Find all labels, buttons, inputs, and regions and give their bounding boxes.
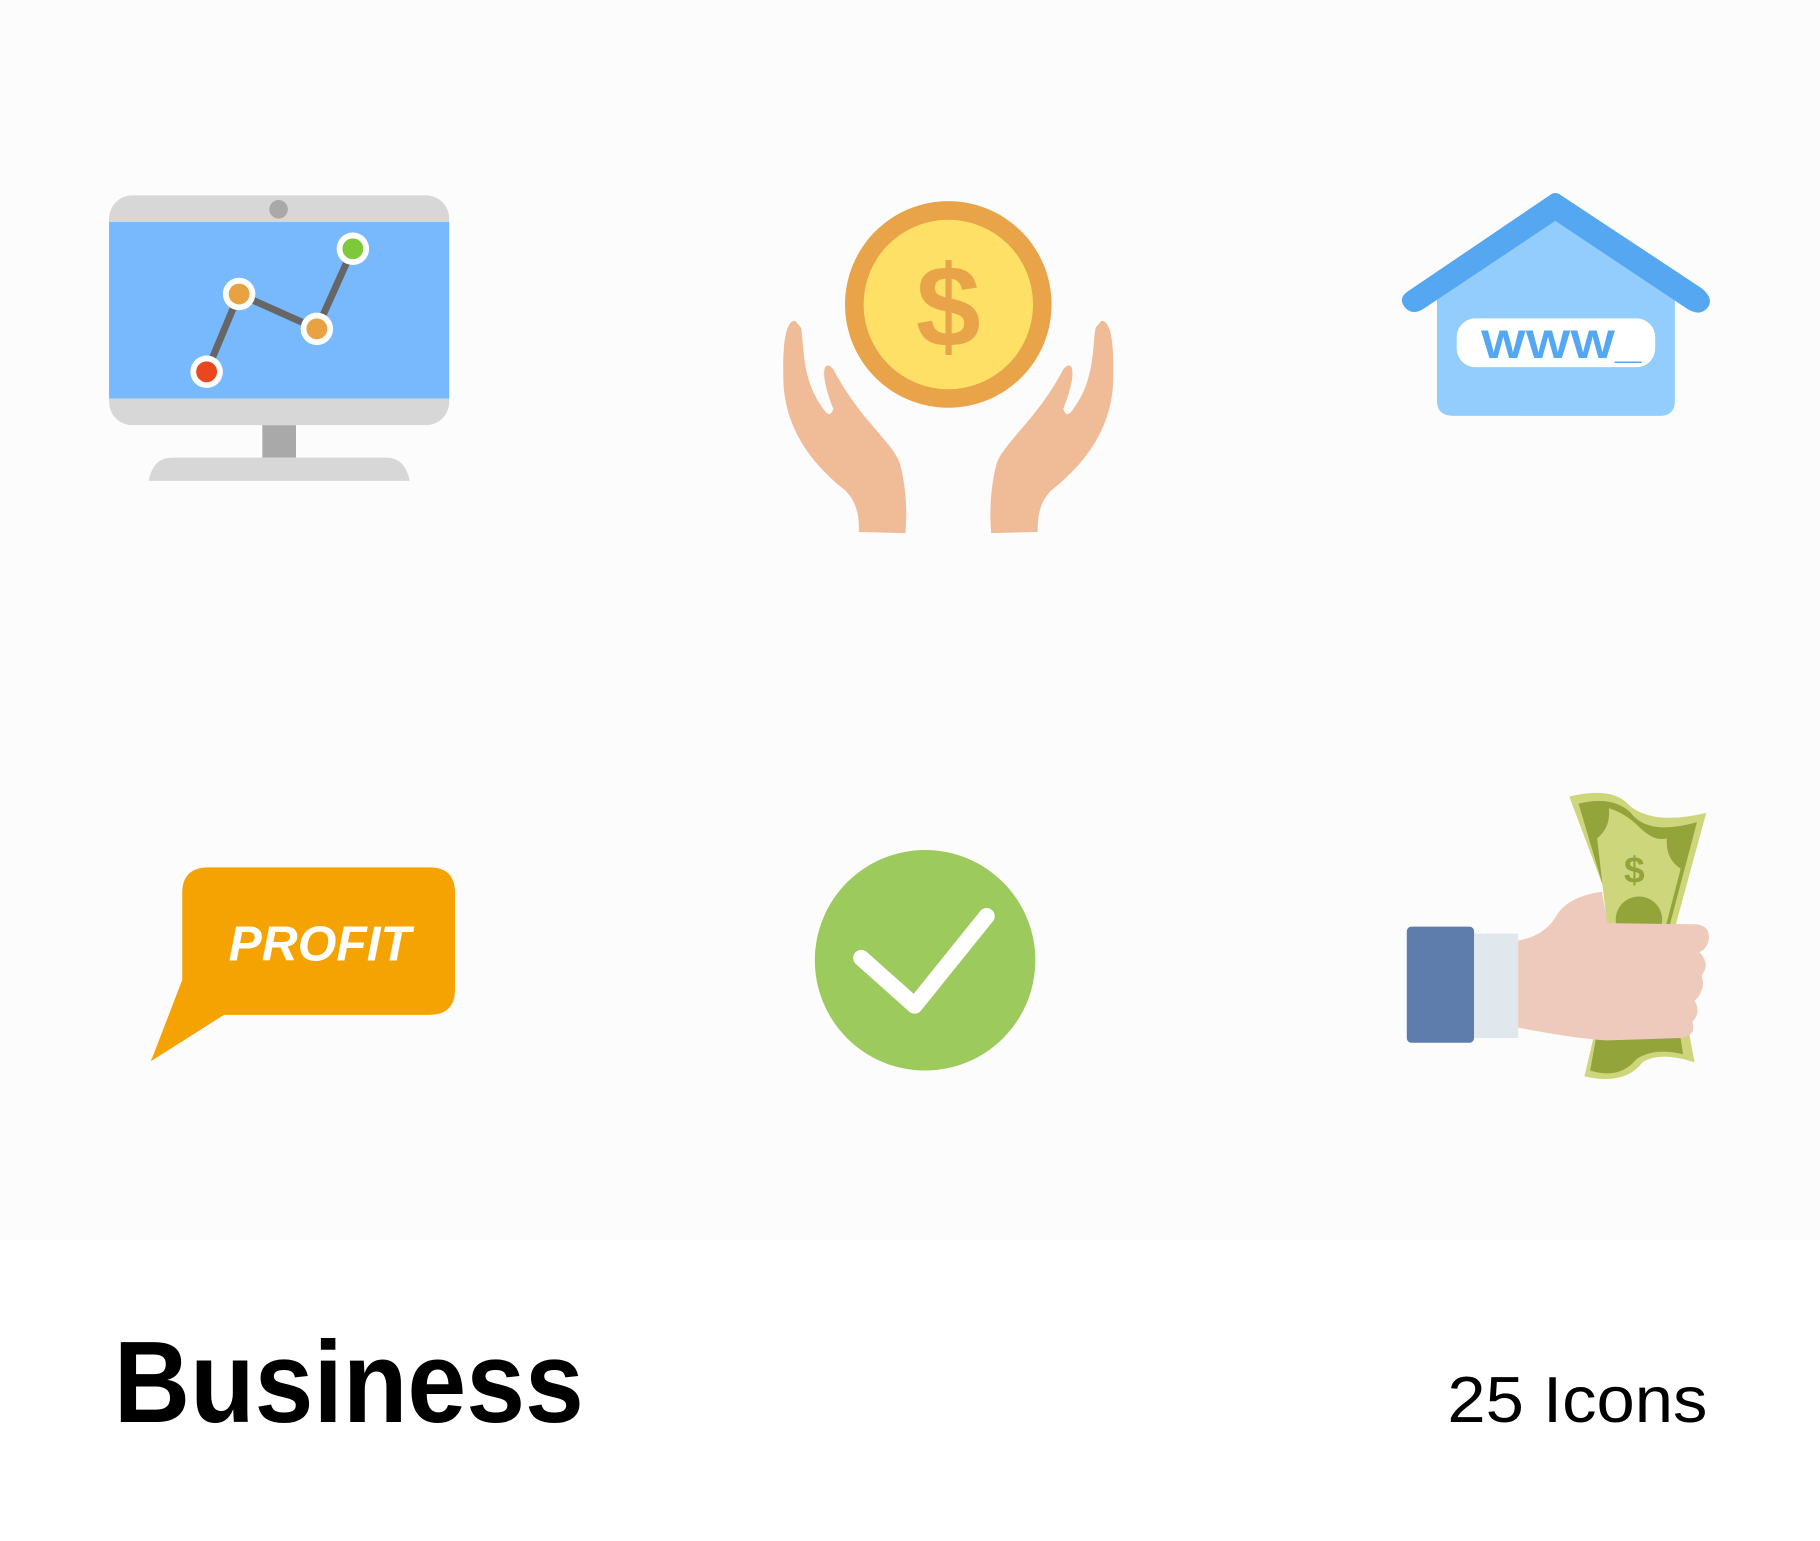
icon: monitor with chart — [109, 195, 449, 481]
title: Business — [114, 1317, 584, 1447]
icon: profit speech bubble — [151, 867, 455, 1061]
icon: check circle — [815, 850, 1035, 1071]
icon: house with www — [1402, 193, 1710, 416]
icon: profit speech bubble: PROFIT — [229, 917, 415, 971]
subtitle: icon count: 25 Icons — [1447, 1363, 1707, 1436]
icon: hands with coin — [783, 201, 1113, 533]
icon: hands with coin: $ — [916, 241, 981, 371]
icon: hand holding money — [1407, 793, 1709, 1079]
icon: hand holding money: $ — [1624, 849, 1645, 891]
icon: house with www: WWW_ — [1481, 323, 1643, 367]
